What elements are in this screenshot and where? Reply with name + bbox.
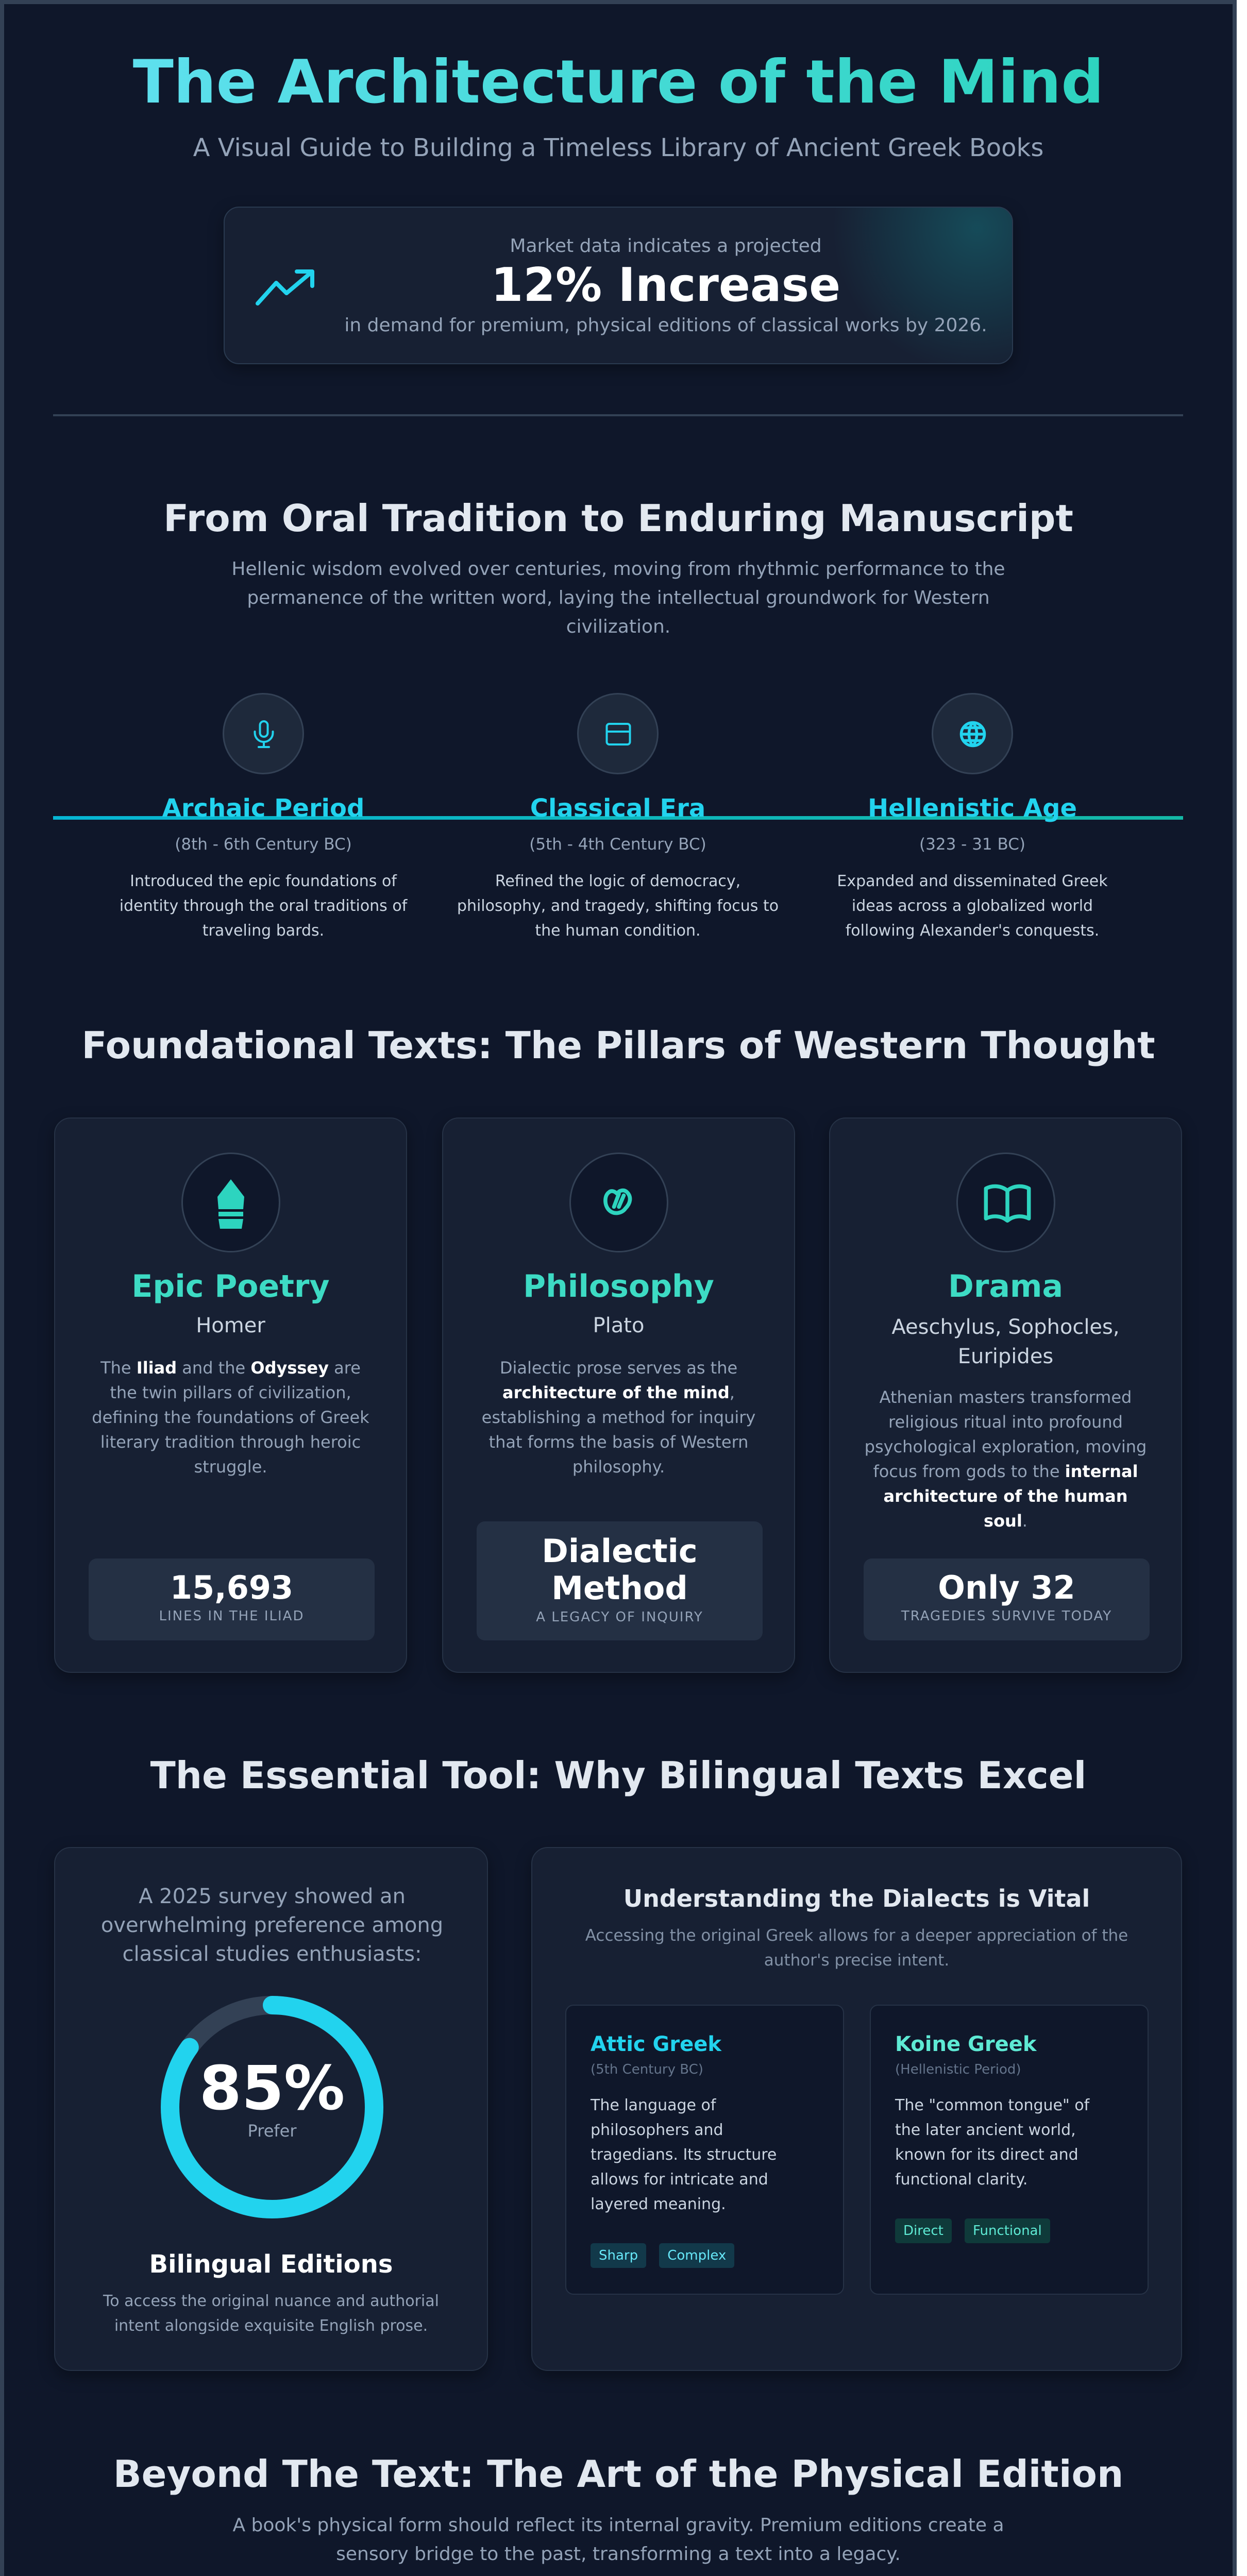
tags [591, 2243, 734, 2268]
text: Classical Era [530, 794, 705, 823]
card: epic poetry [54, 1117, 407, 1673]
stat: 15,693: 15,693 [170, 1569, 293, 1606]
timeline line [53, 816, 1183, 820]
panel: bilingual survey: A 2025 survey showed an overwhelming preference among classical studies enthusiasts: [101, 1885, 443, 1966]
donut chart: 85%: Prefer [247, 2121, 296, 2141]
icon: trending up [256, 269, 314, 306]
timeline: hellenistic [837, 693, 1108, 940]
callout text: 12% Increase [491, 258, 840, 312]
stat: dialectic method: Dialectic [542, 1532, 698, 1570]
card: philosophy: Plato [593, 1314, 644, 1337]
panel: bilingual survey: Bilingual Editions [149, 2250, 393, 2279]
card: drama [829, 1117, 1182, 1673]
tags: Sharp [599, 2248, 638, 2263]
sub-card: attic greek: (5th Century BC) [591, 2062, 703, 2077]
tags: Direct [903, 2223, 943, 2239]
card: philosophy: Dialectic prose serves as the architecture of the mind, establishing a method for inquiry that forms the basis of Western philosophy. [482, 1358, 755, 1477]
text: Refined the logic of democracy, philosophy, and tragedy, shifting focus to the human condition. [457, 872, 779, 940]
callout text [344, 235, 987, 336]
donut chart: 85% [161, 1996, 383, 2218]
text: Expanded and disseminated Greek ideas across a globalized world following Alexander's conquests. [837, 872, 1108, 940]
card: philosophy: Philosophy [523, 1268, 714, 1304]
text: (5th - 4th Century BC) [529, 835, 706, 854]
stat: only 32 [864, 1558, 1150, 1640]
title: The Architecture of the Mind [133, 47, 1104, 117]
stat: 15,693: LINES IN THE ILIAD [159, 1608, 304, 1624]
sub-card: koine greek: The "common tongue" of the later ancient world, known for its direct and functional clarity. [895, 2096, 1089, 2189]
panel: dialects [531, 1847, 1182, 2371]
stat: dialectic method: A LEGACY OF INQUIRY [536, 1609, 703, 1625]
text: (8th - 6th Century BC) [175, 835, 352, 854]
intro text: physical edition: A book's physical form should reflect its internal gravity. Premium editions create a sensory bridge to the past, transforming a text into a legacy. [232, 2515, 1004, 2565]
tags: Functional [973, 2223, 1042, 2239]
card: epic poetry: Epic Poetry [131, 1268, 330, 1304]
stat: only 32: Only 32 [938, 1569, 1075, 1606]
panel: dialects: Understanding the Dialects is Vital [624, 1885, 1090, 1912]
heading: physical edition: Beyond The Text: The Art of the Physical Edition [113, 2452, 1123, 2496]
intro text: oral tradition: Hellenic wisdom evolved over centuries, moving from rhythmic performance to the permanence of the written word, laying the intellectual groundwork for Western civilization. [231, 558, 1005, 637]
sub-card: attic greek: Attic Greek [591, 2032, 721, 2056]
sub-card: attic greek [565, 2005, 844, 2295]
icon: brain [569, 1153, 668, 1252]
panel: bilingual survey [54, 1847, 488, 2371]
sub-card: koine greek: Koine Greek [895, 2032, 1036, 2056]
text: (323 - 31 BC) [919, 835, 1025, 854]
icon: open book [956, 1153, 1055, 1252]
tags: Complex [667, 2248, 726, 2263]
stat: 15,693 [89, 1558, 375, 1640]
subtitle: A Visual Guide to Building a Timeless Library of Ancient Greek Books [193, 133, 1043, 162]
heading: oral tradition: From Oral Tradition to Enduring Manuscript [163, 497, 1073, 540]
panel: dialects: Accessing the original Greek allows for a deeper appreciation of the author's precise intent. [585, 1926, 1128, 1970]
text: Archaic Period [162, 794, 364, 823]
card: philosophy [442, 1117, 795, 1673]
heading: foundational texts: Foundational Texts: The Pillars of Western Thought [81, 1024, 1155, 1067]
card: epic poetry: Homer [196, 1314, 265, 1337]
tags [895, 2218, 1050, 2243]
donut chart: 85%: 85% [199, 2053, 345, 2124]
card: drama: Athenian masters transformed religious ritual into profound psychological exploration, moving focus from gods to the internal architecture of the human soul. [865, 1387, 1147, 1531]
card: drama: Aeschylus, Sophocles, Euripides [891, 1315, 1120, 1368]
icon: globe [932, 693, 1013, 774]
text: Introduced the epic foundations of identity through the oral traditions of traveling bards. [120, 872, 407, 940]
icon: microphone [223, 693, 304, 774]
icon: pen nib [181, 1153, 280, 1252]
text: Hellenistic Age [868, 794, 1077, 823]
card: epic poetry: The Iliad and the Odyssey are the twin pillars of civilization, defining the foundations of Greek literary tradition through heroic struggle. [92, 1358, 369, 1477]
timeline: archaic [120, 693, 408, 940]
panel: bilingual survey: To access the original nuance and authorial intent alongside exquisite English prose. [103, 2292, 439, 2335]
icon: archive [577, 693, 659, 774]
callout text: Market data indicates a projected [510, 235, 822, 257]
callout: market data [224, 207, 1013, 364]
sub-card: attic greek: The language of philosophers and tragedians. Its structure allows for intricate and layered meaning. [591, 2096, 777, 2213]
callout text: in demand for premium, physical editions of classical works by 2026. [344, 315, 987, 336]
timeline: classical [457, 693, 779, 940]
stat: only 32: TRAGEDIES SURVIVE TODAY [901, 1608, 1112, 1624]
stat: dialectic method: Method [551, 1569, 688, 1607]
stat: dialectic method [477, 1521, 763, 1640]
sub-card: koine greek [870, 2005, 1149, 2295]
heading: bilingual: The Essential Tool: Why Bilingual Texts Excel [150, 1754, 1086, 1797]
card: drama: Drama [948, 1268, 1063, 1304]
sub-card: koine greek: (Hellenistic Period) [895, 2062, 1021, 2077]
